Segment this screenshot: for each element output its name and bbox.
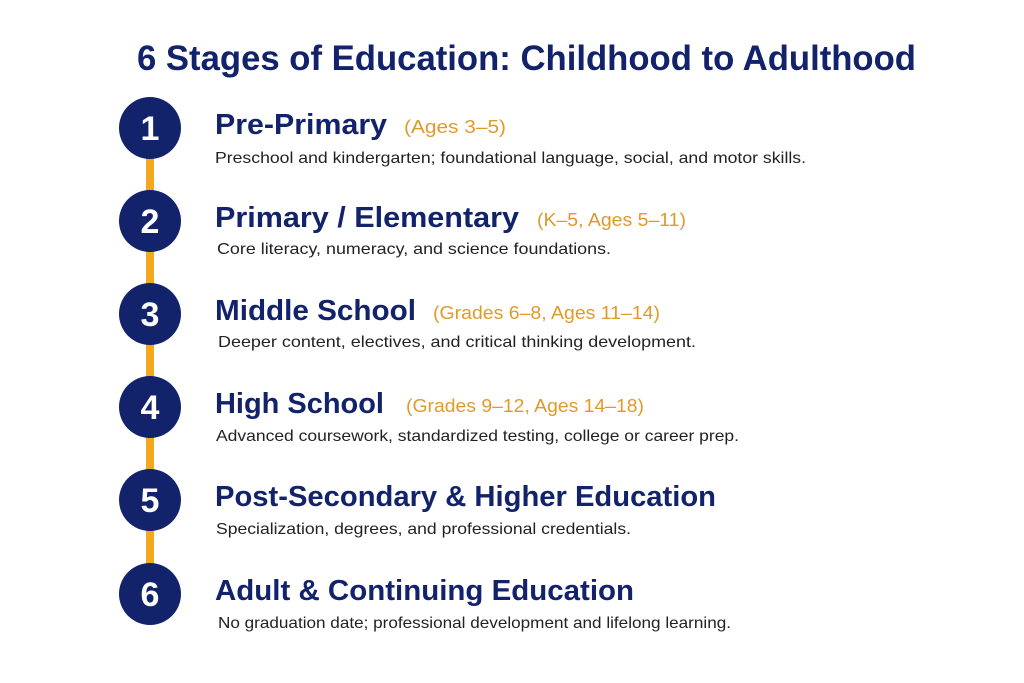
stage 4: High School xyxy=(215,388,384,420)
stage 4: 4 xyxy=(141,389,160,427)
stage 6: 6 xyxy=(141,576,159,614)
stage 2: 2 xyxy=(141,203,159,241)
stage 2: Primary / Elementary xyxy=(215,202,519,234)
stage 4: Advanced coursework, standardized testing, college or career prep. xyxy=(216,428,739,445)
stage 5 xyxy=(119,469,716,538)
timeline line xyxy=(146,128,154,594)
stage 2 xyxy=(119,190,686,258)
title: 6 Stages of Education: Childhood to Adulthood xyxy=(137,39,916,78)
stage 3 xyxy=(119,283,696,351)
stage 3: Middle School xyxy=(215,295,416,327)
stage 4 xyxy=(119,376,739,445)
stage 1: Preschool and kindergarten; foundational language, social, and motor skills. xyxy=(215,150,806,167)
stage 5: 5 xyxy=(141,482,159,520)
stage 1: Pre-Primary xyxy=(215,109,387,141)
stage 3: Deeper content, electives, and critical thinking development. xyxy=(218,334,696,351)
stage 6: No graduation date; professional development and lifelong learning. xyxy=(218,615,731,632)
stage 1: (Ages 3–5) xyxy=(404,117,506,137)
stage 1 xyxy=(119,97,806,167)
stage 2: Core literacy, numeracy, and science foundations. xyxy=(217,241,611,258)
stage 1: 1 xyxy=(141,110,159,148)
stage 3: 3 xyxy=(141,296,159,334)
stage 2: (K–5, Ages 5–11) xyxy=(537,210,686,230)
stage 3: (Grades 6–8, Ages 11–14) xyxy=(433,303,660,323)
stage 6: Adult & Continuing Education xyxy=(215,575,634,607)
stage 4: (Grades 9–12, Ages 14–18) xyxy=(406,396,644,416)
stage 5: Specialization, degrees, and professional credentials. xyxy=(216,521,631,538)
stage 6 xyxy=(119,563,731,632)
stage 5: Post-Secondary & Higher Education xyxy=(215,481,716,513)
